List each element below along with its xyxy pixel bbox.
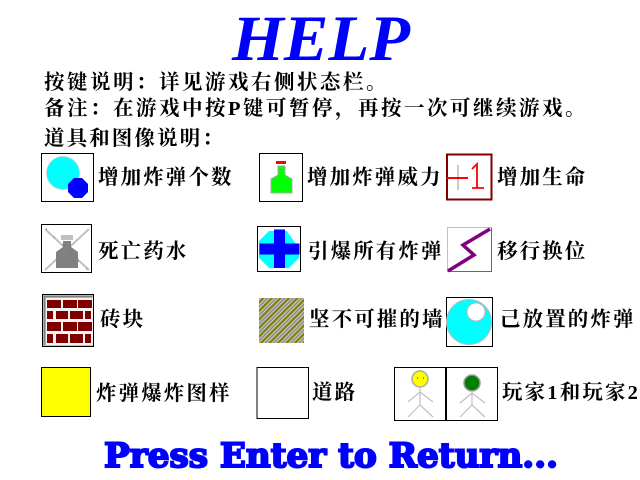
label: solid wall: 坚不可摧的墙 [309, 308, 445, 331]
player 2 [460, 375, 485, 417]
player 1 [408, 371, 433, 417]
icon: placed bomb [446, 298, 492, 346]
return prompt: Press Enter to Return... [104, 436, 558, 476]
label: bomb power: 增加炸弹威力 [307, 166, 443, 189]
label: placed bomb: 己放置的炸弹 [500, 308, 636, 331]
icon: death potion [42, 224, 92, 272]
label: teleport: 移行换位 [497, 239, 587, 263]
label: players: 玩家1和玩家2 [502, 380, 640, 404]
item heading: 道具和图像说明： [44, 127, 225, 150]
icon: bomb power [260, 154, 302, 202]
label: road: 道路 [312, 381, 357, 404]
icon: players [394, 368, 498, 420]
icon: extra bomb [42, 154, 94, 202]
label: extra bomb: 增加炸弹个数 [98, 166, 234, 189]
title: HELP [231, 3, 411, 75]
icon: solid wall [259, 298, 304, 343]
icon: road [257, 368, 308, 418]
note: 备注：在游戏中按P键可暂停，再按一次可继续游戏。 [44, 97, 588, 120]
icon: detonate all [258, 226, 300, 272]
icon: brick [42, 294, 94, 346]
icon: plus one life [447, 154, 492, 200]
icon: explosion [42, 368, 90, 416]
label: extra life: 增加生命 [497, 166, 587, 189]
key instructions: 按键说明：详见游戏右侧状态栏。 [44, 70, 389, 94]
icon: teleport [448, 228, 492, 272]
label: detonate all: 引爆所有炸弹 [308, 239, 444, 263]
instructions text [44, 70, 588, 150]
label: death potion: 死亡药水 [98, 239, 188, 263]
label: explosion: 炸弹爆炸图样 [95, 382, 232, 405]
label: brick: 砖块 [100, 308, 145, 331]
